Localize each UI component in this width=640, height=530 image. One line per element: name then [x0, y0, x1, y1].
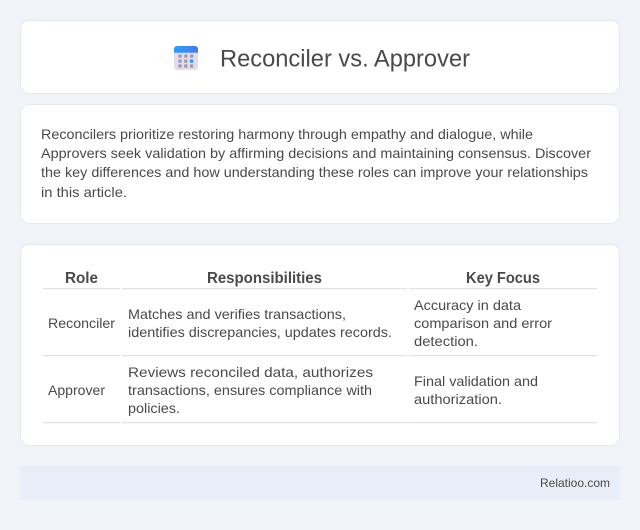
table row: Reconciler: Reconciler	[48, 315, 115, 331]
intro text: Approvers seek validation by affirming decisions and maintaining consensus. Discover	[41, 145, 591, 161]
table header row	[65, 270, 540, 287]
table row: Reconciler: Accuracy in data	[414, 297, 521, 313]
footer bar	[20, 466, 620, 500]
table row: Reconciler: identifies discrepancies, updates records.	[128, 324, 392, 340]
icon: calendar	[174, 46, 198, 70]
intro text: the key differences and how understanding these roles can improve your relationships	[41, 164, 588, 180]
intro text	[41, 126, 591, 200]
panel: comparison table	[20, 244, 620, 446]
table row: Approver: authorization.	[414, 391, 502, 407]
intro text: Reconcilers prioritize restoring harmony through empathy and dialogue, while	[41, 126, 533, 142]
title: Reconciler vs. Approver	[220, 46, 470, 72]
table header row: Responsibilities	[207, 270, 322, 287]
table row: Reconciler: detection.	[414, 333, 478, 349]
panel: intro paragraph	[20, 104, 620, 224]
table row: Approver: Final validation and	[414, 373, 538, 389]
table row: Reconciler: comparison and error	[414, 315, 552, 331]
table row: Approver: transactions, ensures compliance with	[128, 382, 372, 398]
table row: Approver: Approver	[48, 382, 105, 398]
intro text: in this article.	[41, 184, 127, 200]
table row: Approver: Reviews reconciled data, authorizes	[128, 364, 373, 380]
table row: Reconciler: Matches and verifies transactions,	[128, 306, 346, 322]
table row: Reconciler	[48, 297, 552, 349]
footer credit: Relatioo.com	[540, 476, 610, 490]
table header row: Role	[65, 270, 98, 287]
table row: Approver: policies.	[128, 400, 180, 416]
panel: header	[20, 20, 620, 94]
table row: Approver	[48, 364, 538, 416]
table header row: Key Focus	[466, 270, 540, 287]
